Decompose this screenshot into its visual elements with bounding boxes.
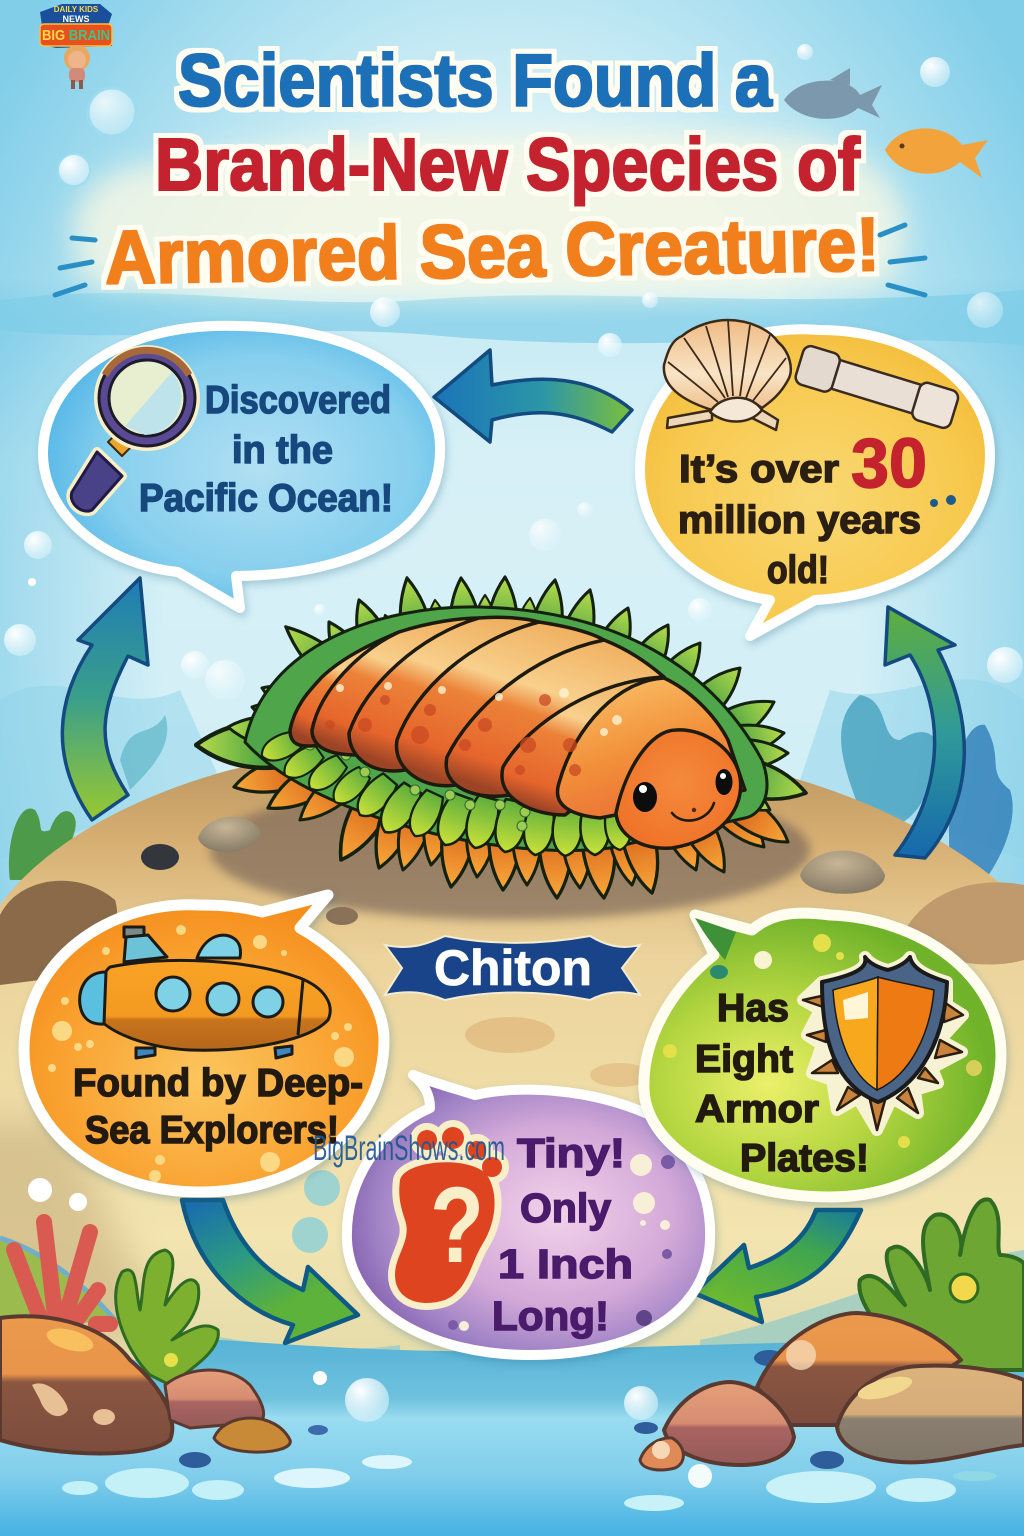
- text: armor: Plates!: [740, 1137, 869, 1180]
- question mark: ?: [430, 1164, 484, 1285]
- icon: grey fish: [784, 68, 882, 119]
- text: age: [678, 424, 927, 592]
- shell spots: [325, 694, 581, 776]
- title line 2: Brand-New Species of: [155, 123, 860, 206]
- panel: eight armor plates: [644, 913, 1001, 1197]
- large rock: [0, 1316, 172, 1454]
- chiton face: [616, 730, 741, 848]
- logo badge: [40, 4, 112, 48]
- right eye: [716, 769, 732, 795]
- purple specks: [448, 1154, 675, 1331]
- logo: Daily Kids News Big Brain: NEWS: [62, 14, 90, 24]
- arrow: orange to blue: [62, 578, 148, 820]
- text: discovered: Pacific Ocean!: [139, 477, 393, 520]
- text: explorers: Found by Deep-: [73, 1062, 363, 1105]
- tiny rock: [640, 1438, 683, 1470]
- text: size: [492, 1130, 633, 1339]
- logo: Daily Kids News Big Brain: BIG BRAIN: [42, 27, 110, 44]
- text: armor: Armor: [695, 1088, 819, 1131]
- bottom left reef: [0, 1222, 290, 1454]
- panel: over 30 million years old: [640, 320, 990, 636]
- small orange rock: [664, 1382, 794, 1465]
- nose: [692, 808, 696, 812]
- shield outline: [803, 957, 963, 1130]
- text: age: million years: [678, 499, 921, 542]
- icon: orange fish: [885, 128, 988, 178]
- icon: scallop shell: [664, 320, 791, 430]
- green tail shade and specks: [663, 918, 982, 1148]
- title line 1: Scientists Found a: [178, 39, 773, 122]
- handle: [71, 432, 132, 511]
- left eye: [633, 782, 657, 812]
- orange rock: [757, 1313, 961, 1425]
- text: discovered: Discovered: [205, 379, 391, 422]
- green spiky rim: [196, 575, 811, 822]
- smile: [672, 803, 714, 821]
- spikes: [803, 995, 963, 1130]
- sand shading near shore: [0, 1120, 1024, 1362]
- logo character: [64, 45, 90, 89]
- text: explorers: Sea Explorers!: [85, 1109, 339, 1152]
- text: age: It’s over: [679, 448, 839, 491]
- small rock: [214, 1418, 290, 1452]
- decorative dots: [930, 495, 956, 507]
- green mantle: [245, 607, 767, 850]
- bottom right reef: [640, 1199, 1024, 1470]
- orange specks: [48, 925, 354, 1182]
- chiton name ribbon: Chiton: [434, 940, 592, 996]
- text: armor: Has: [717, 987, 789, 1030]
- red coral fingers: [14, 1222, 110, 1324]
- chiton name ribbon: [385, 936, 640, 1000]
- panel: discovered in the Pacific: [43, 326, 440, 608]
- arrow: orange to purple: [182, 1200, 358, 1343]
- icon: footprint with question mark: [395, 1127, 502, 1303]
- title line 3: Armored Sea Creature!: [104, 202, 881, 301]
- icon: spiked shield: [803, 957, 963, 1130]
- lens: [94, 345, 200, 451]
- shell highlights: [336, 682, 622, 736]
- chiton creature: [196, 575, 811, 900]
- text: armor: Eight: [695, 1038, 793, 1081]
- icon: submarine: [80, 927, 330, 1058]
- text: age: 30: [851, 424, 927, 502]
- text: size: Long!: [492, 1293, 609, 1339]
- sand stones: [0, 780, 1024, 1087]
- text: armor: [695, 987, 869, 1180]
- icon: fossil bone scroll: [794, 344, 960, 430]
- arrow: green to yellow: [885, 607, 964, 858]
- panel: tiny only 1 inch long: [347, 1075, 710, 1355]
- arrow: yellow to blue: [434, 350, 632, 442]
- text: size: Only: [520, 1185, 611, 1231]
- text: discovered: [139, 379, 393, 520]
- text: size: 1 Inch: [498, 1241, 633, 1287]
- background seaweed: [9, 695, 1013, 880]
- icon: magnifying glass: [71, 345, 200, 511]
- panel: found by deep-sea explorers: [24, 895, 384, 1192]
- green kelp: [116, 1250, 218, 1385]
- text: explorers: [73, 1062, 363, 1152]
- text: size: Tiny!: [517, 1130, 625, 1176]
- arrow: green to purple: [694, 1210, 861, 1322]
- bottom water: [0, 1340, 1024, 1536]
- tan rock: [837, 1366, 1024, 1462]
- shell plates: [290, 617, 745, 818]
- orange outer frill: [230, 755, 796, 900]
- title splash marks: [55, 225, 925, 295]
- sand hill: [0, 741, 1024, 1360]
- green kelp: [859, 1199, 1024, 1370]
- pink rock: [165, 1370, 264, 1428]
- background bubbles: [4, 44, 1023, 700]
- text: discovered: in the: [232, 429, 333, 472]
- water ripples and pebbles: [62, 1350, 997, 1511]
- green lobes: [257, 728, 633, 857]
- title backdrop: [73, 132, 905, 296]
- text: age: old!: [767, 549, 829, 592]
- logo text: DAILY KIDS: [54, 5, 99, 14]
- watermark: BigBrainShows.com: [313, 1129, 505, 1168]
- title: [104, 39, 881, 301]
- logo: Daily Kids News Big Brain: [40, 4, 112, 89]
- mantle bumps: [305, 740, 565, 831]
